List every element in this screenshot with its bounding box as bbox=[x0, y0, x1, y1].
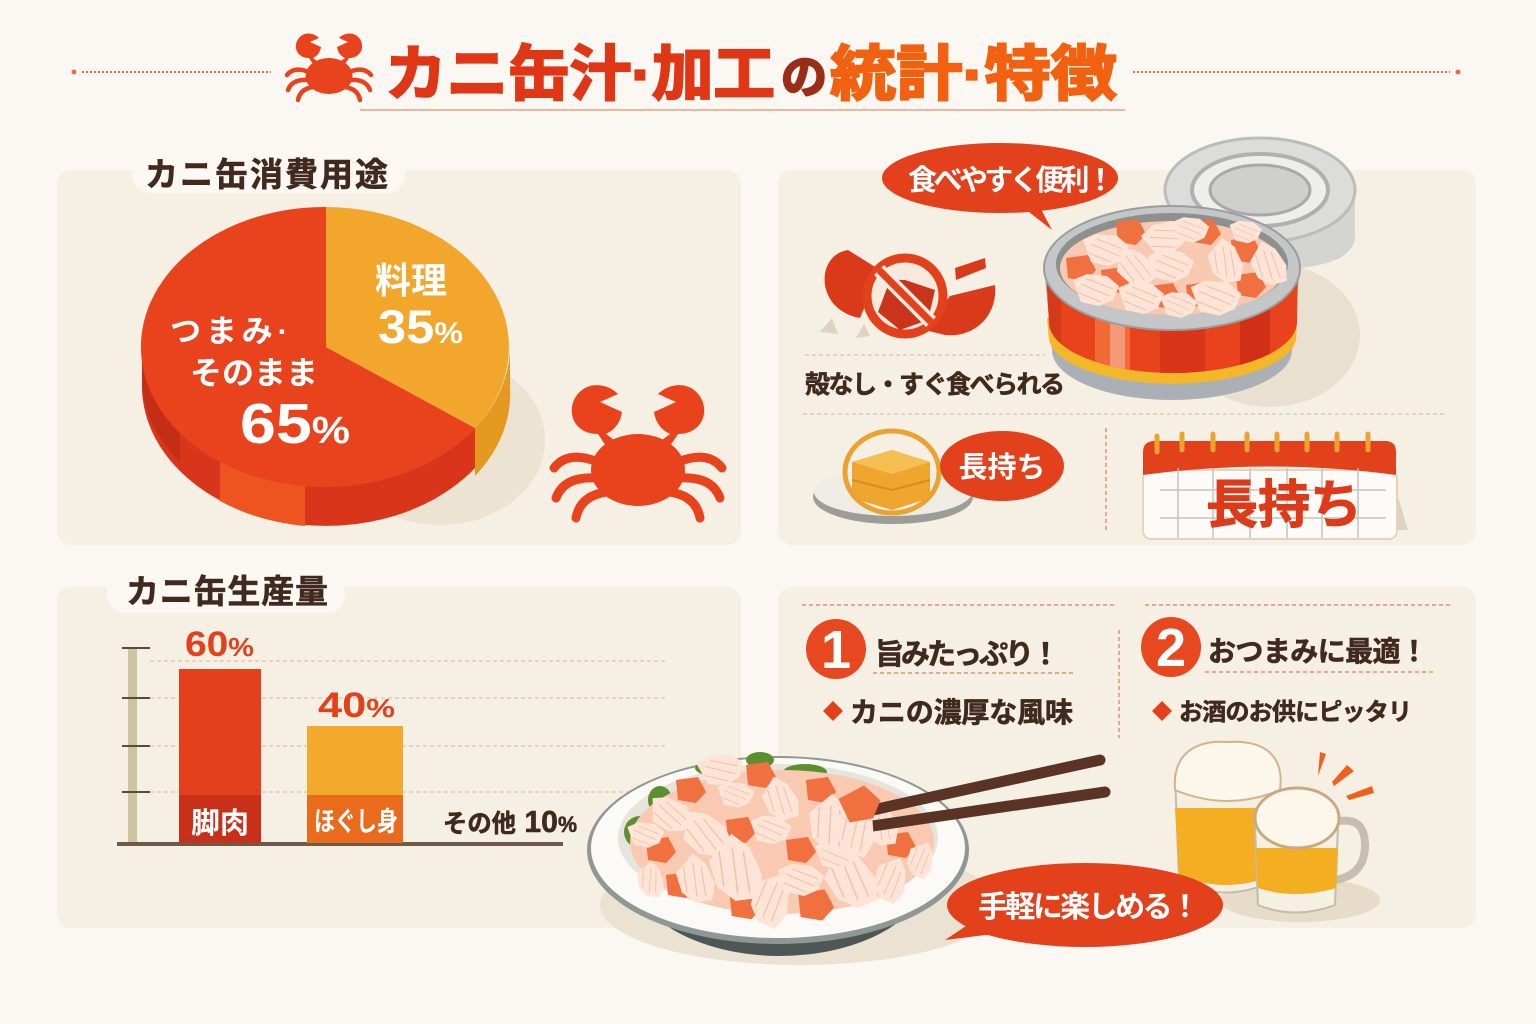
icon: title crab bbox=[287, 34, 371, 100]
dashed divider long bbox=[803, 413, 1445, 415]
point 1 bbox=[806, 619, 1073, 728]
vertical divider bbox=[1105, 428, 1107, 530]
icon: beer mugs bbox=[1175, 742, 1380, 922]
crab pieces bbox=[627, 750, 933, 929]
point 2 bbox=[1141, 617, 1428, 726]
bar chart bbox=[117, 625, 668, 846]
icon: can lid bbox=[1165, 138, 1355, 268]
pie chart bbox=[141, 207, 510, 526]
title text bbox=[385, 41, 1117, 108]
slice: snacks 65% bbox=[141, 207, 475, 487]
point 1: カニの濃厚な風味 bbox=[850, 697, 1073, 728]
pie side orange bbox=[475, 347, 510, 476]
panel: points bbox=[587, 587, 1476, 965]
speech bubble: easy to eat bbox=[882, 143, 1118, 230]
bubble: long lasting bbox=[940, 431, 1064, 501]
can yellow band bbox=[1047, 318, 1297, 384]
label: cooking: 料理 bbox=[375, 260, 447, 301]
can shadow bbox=[1180, 263, 1360, 407]
point 2: お酒のお供にピッタリ bbox=[1179, 699, 1412, 726]
panel: production bbox=[57, 573, 741, 928]
sparkle lines bbox=[1318, 752, 1374, 800]
bar: flaked 40%: ほぐし身 bbox=[314, 807, 398, 837]
can rim bbox=[1044, 206, 1300, 330]
panel background bbox=[778, 170, 1476, 545]
bar: leg meat 60% bbox=[179, 625, 261, 843]
panel tab heading: カニ缶消費用途 bbox=[145, 156, 388, 193]
bar: leg meat 60%: 脚肉 bbox=[191, 807, 249, 840]
can body bbox=[1044, 268, 1300, 400]
label: snacks: そのまま bbox=[190, 355, 318, 391]
title left rule bbox=[72, 70, 271, 74]
title right rule bbox=[1133, 70, 1460, 74]
title text: カニ缶汁·加工 bbox=[385, 41, 775, 108]
pie shadow bbox=[335, 355, 545, 525]
can label bbox=[1046, 282, 1298, 373]
label: snacks: つまみ· bbox=[170, 314, 288, 349]
label: cooking bbox=[375, 260, 463, 353]
icon: crab can bbox=[1040, 206, 1310, 400]
label: snacks bbox=[170, 314, 350, 456]
axis and grid bbox=[117, 647, 668, 846]
panel: consumption use bbox=[57, 155, 741, 545]
panel tab heading: カニ缶生産量 bbox=[126, 573, 328, 610]
small mug bbox=[1255, 788, 1365, 912]
point 1: 旨みたっぷり！ bbox=[875, 638, 1060, 671]
panel background bbox=[57, 170, 741, 545]
title text: の bbox=[781, 51, 827, 103]
point 2: 2 bbox=[1156, 618, 1186, 678]
point 1: 1 bbox=[821, 620, 851, 680]
icon: calendar: 長持ち bbox=[1206, 477, 1362, 535]
speech bubble: enjoy easily: 手軽に楽しめる！ bbox=[978, 891, 1200, 924]
icon: calendar bbox=[1143, 434, 1408, 539]
label: cooking: 35% bbox=[378, 300, 463, 353]
garnish bbox=[624, 752, 827, 848]
title bbox=[72, 34, 1460, 111]
bar: leg meat 60%: 60% bbox=[185, 625, 254, 664]
slice: cooking 35% bbox=[326, 207, 509, 428]
point 2: おつまみに最適！ bbox=[1208, 636, 1428, 667]
panel background bbox=[778, 587, 1476, 928]
title text: 統計·特徴 bbox=[830, 41, 1117, 108]
bar: flaked 40% bbox=[307, 686, 403, 843]
icon: preserved food plate bbox=[813, 431, 973, 524]
title underline bbox=[360, 109, 1125, 111]
chopsticks bbox=[845, 760, 1105, 830]
bar: flaked 40%: 40 % bbox=[318, 686, 395, 725]
big mug bbox=[1175, 742, 1281, 892]
icon: crab bbox=[554, 385, 722, 518]
dashed divider short bbox=[805, 354, 1045, 356]
text: no shell, ready to eat: 殻なし・すぐ食べられる bbox=[805, 371, 1065, 399]
pie side red bbox=[142, 347, 475, 526]
panel background bbox=[57, 587, 741, 928]
bubble: long lasting: 長持ち bbox=[958, 451, 1046, 484]
label: other 10%: その他 10% bbox=[443, 804, 577, 839]
speech bubble: easy to eat: 食べやすく便利！ bbox=[908, 164, 1115, 197]
can crab meat bbox=[1066, 215, 1296, 318]
label: snacks: 65% bbox=[240, 392, 350, 456]
held crab piece bbox=[801, 782, 885, 862]
panel: can features bbox=[778, 138, 1476, 545]
speech bubble: enjoy easily bbox=[945, 863, 1223, 947]
dashed rules bbox=[802, 605, 1450, 738]
icon: no shell bbox=[820, 250, 995, 338]
icon: plate of crab meat bbox=[587, 750, 1105, 965]
